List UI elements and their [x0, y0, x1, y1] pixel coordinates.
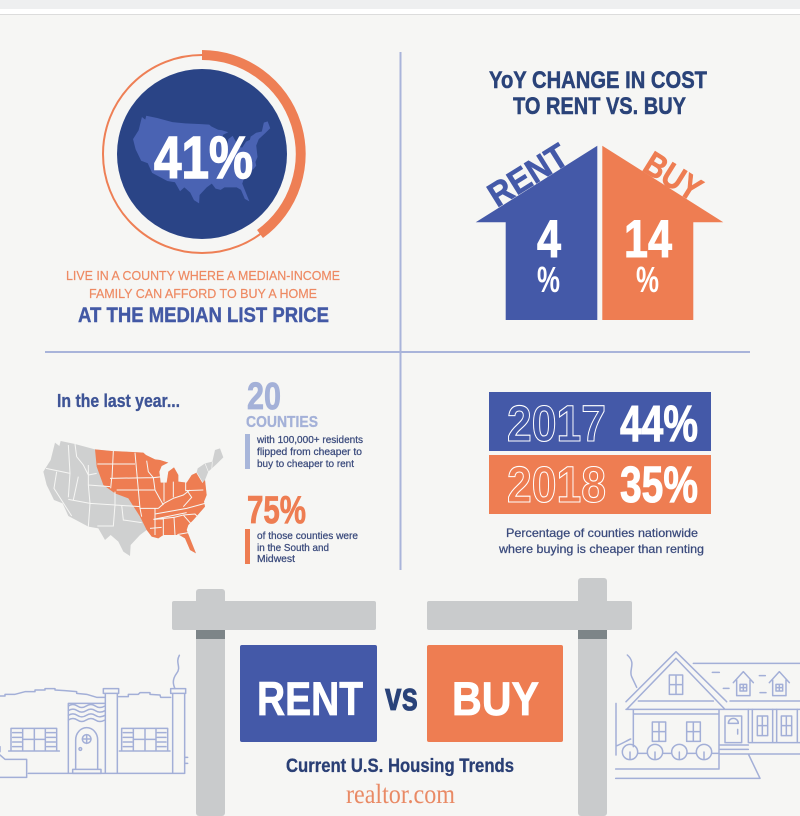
buy house — [602, 145, 723, 320]
sign: BUY — [427, 645, 563, 742]
panel: percentage of counties — [489, 392, 711, 556]
rent house: 4 — [537, 210, 561, 269]
heading: In the last year... — [57, 391, 180, 411]
US map with flipped region — [43, 441, 223, 556]
bar: 2017: 2017 — [507, 395, 606, 452]
caption: FAMILY CAN AFFORD TO BUY A HOME — [89, 286, 317, 301]
illustration: left house — [0, 655, 188, 777]
heading — [489, 67, 707, 120]
stat: 20 counties: flipped from cheaper to — [257, 446, 362, 458]
sign: RENT: RENT — [257, 672, 363, 725]
label: vs: vs — [385, 675, 418, 719]
stat: 20 counties — [245, 376, 363, 470]
caption — [66, 268, 340, 327]
caption: LIVE IN A COUNTY WHERE A MEDIAN-INCOME — [66, 268, 340, 283]
buy house: BUY — [637, 145, 709, 209]
panel: 41% affordability — [66, 55, 340, 327]
caption: Percentage of counties nationwide — [506, 526, 698, 540]
stat: 75%: 75% — [247, 489, 306, 532]
stat: 75%: in the South and — [257, 542, 329, 554]
41% figure: 41% — [154, 125, 253, 191]
logo: realtor.com: realtor.com — [346, 779, 455, 809]
caption: AT THE MEDIAN LIST PRICE — [78, 304, 329, 327]
sign: left post and beam — [172, 589, 376, 816]
subtitle: Current U.S. Housing Trends — [286, 756, 514, 777]
bar: 2017 — [489, 392, 711, 452]
caption — [498, 526, 704, 556]
stat: 20 counties: with 100,000+ residents — [256, 434, 363, 446]
stat: 20 counties: buy to cheaper to rent — [257, 458, 354, 470]
illustration: right house — [616, 652, 800, 778]
stat: 75%: Midwest — [257, 553, 295, 565]
dark circle with US map — [117, 69, 287, 239]
rent house: RENT — [481, 136, 575, 215]
buy house: % — [636, 259, 659, 300]
caption: where buying is cheaper than renting — [498, 542, 704, 556]
panel: YoY change in cost — [476, 67, 723, 320]
sign: BUY: BUY — [452, 672, 539, 725]
bar: 2017: 44% — [620, 395, 698, 452]
rent house: % — [537, 259, 560, 300]
sign: RENT — [240, 645, 377, 742]
stat: 75% — [245, 489, 358, 565]
bar: 2018: 2018 — [507, 456, 606, 513]
donut ring — [103, 55, 301, 253]
rent house — [476, 136, 597, 320]
stat: 20 counties: 20 — [247, 376, 281, 418]
sign: right post and beam — [427, 578, 632, 816]
stat: 75%: of those counties were — [257, 530, 358, 542]
stat: 20 counties: COUNTIES — [246, 414, 318, 431]
bar: 2018: 35% — [620, 456, 698, 513]
heading: TO RENT VS. BUY — [513, 93, 686, 120]
heading: YoY CHANGE IN COST — [489, 67, 707, 94]
panel: in the last year — [43, 376, 363, 565]
buy house: 14 — [624, 210, 672, 269]
bar: 2018 — [489, 455, 711, 514]
